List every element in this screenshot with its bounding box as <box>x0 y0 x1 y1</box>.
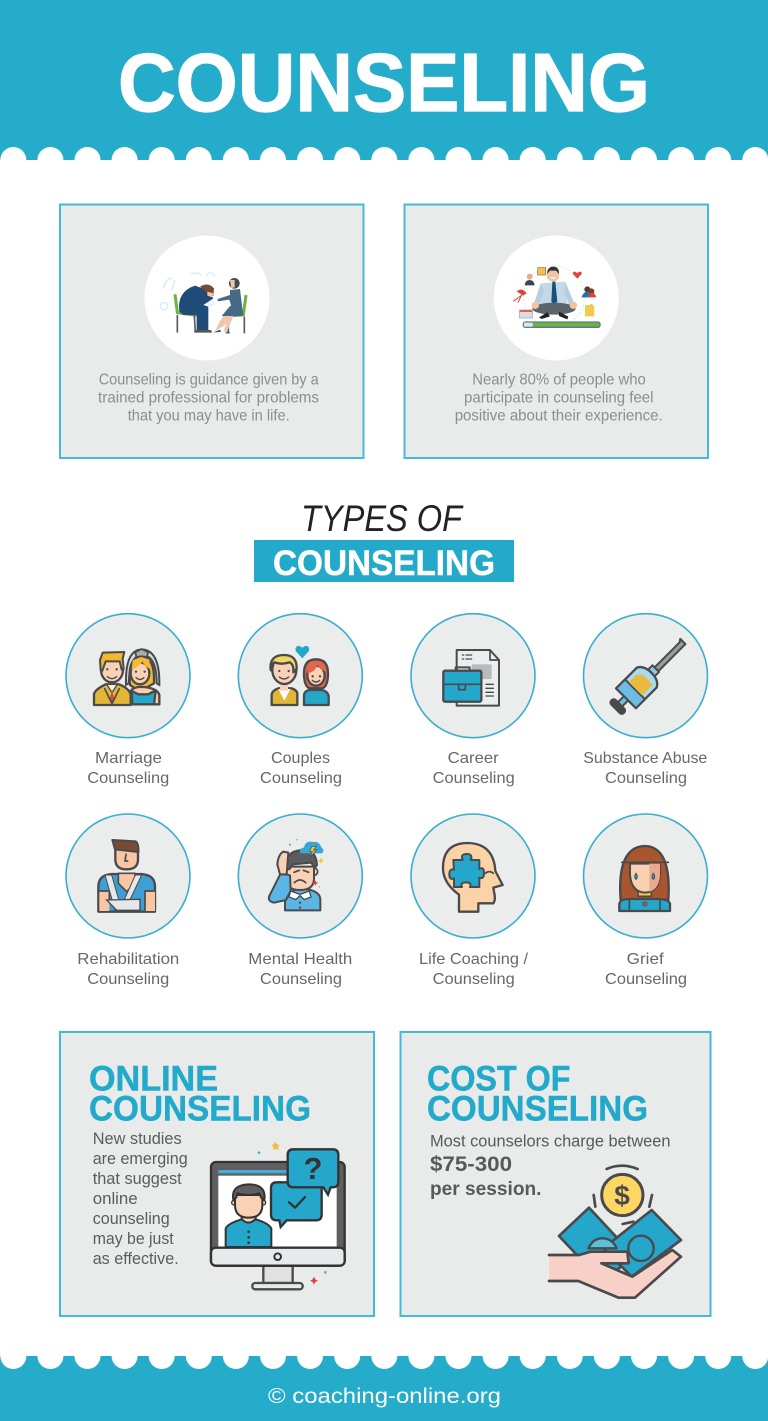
text: statistic <box>455 372 663 424</box>
text: statistic: Nearly 80% of people who <box>472 372 646 388</box>
type: rehabilitation counseling <box>66 814 190 988</box>
type: marriage counseling: Marriage <box>95 750 162 767</box>
type: life coaching counseling: Counseling <box>433 971 515 988</box>
text: cost description: per session. <box>430 1179 542 1200</box>
type: grief counseling: Grief <box>627 951 664 968</box>
header banner with title <box>0 0 768 160</box>
text: cost description <box>430 1132 670 1200</box>
text: definition <box>98 372 319 424</box>
type: grief counseling <box>584 814 708 988</box>
icon: monitor with video call and chat bubbles <box>211 1142 345 1289</box>
type: couples counseling: Counseling <box>260 770 342 787</box>
icon: crying woman <box>619 846 670 911</box>
heading: types of counseling <box>254 498 514 583</box>
icon: man with arm sling <box>98 840 155 912</box>
text: question mark in bubble: ? <box>304 1151 322 1186</box>
text: online counseling body: as effective. <box>93 1249 179 1268</box>
type: marriage counseling <box>66 614 190 787</box>
panel: online counseling <box>60 1032 374 1316</box>
type: career counseling: Counseling <box>433 770 515 787</box>
illustration: client and counselor on chairs <box>160 272 246 334</box>
type: marriage counseling: Counseling <box>87 770 169 787</box>
type: substance abuse counseling: Substance Abuse <box>583 750 707 767</box>
header banner with title: COUNSELING <box>118 36 650 129</box>
text: online counseling body: online <box>93 1189 138 1208</box>
type: mental health counseling: Mental Health <box>248 951 352 968</box>
footer banner with credit: © coaching-online.org <box>268 1385 501 1408</box>
text: online counseling body: that suggest <box>93 1169 182 1188</box>
type: rehabilitation counseling: Counseling <box>87 971 169 988</box>
text: online counseling body <box>93 1129 188 1268</box>
heading: online counseling: ONLINE <box>89 1060 218 1098</box>
heading: cost of counseling: COUNSELING <box>427 1090 648 1128</box>
panel: definition of counseling <box>60 204 364 458</box>
type: grief counseling: Counseling <box>605 971 687 988</box>
type: substance abuse counseling: Counseling <box>605 770 687 787</box>
illustration: meditating man with life icons <box>513 266 600 327</box>
type: career counseling: Career <box>448 750 499 767</box>
text: online counseling body: New studies <box>93 1129 182 1148</box>
icon: briefcase and document <box>443 650 499 706</box>
panel: positive experience statistic <box>404 204 708 458</box>
type: rehabilitation counseling: Rehabilitation <box>77 951 179 968</box>
text: online counseling body: may be just <box>93 1229 174 1248</box>
heading: online counseling <box>89 1060 311 1128</box>
icon: bride and groom <box>94 649 159 705</box>
text: definition: trained professional for problems <box>98 390 319 406</box>
type: couples counseling <box>238 614 362 787</box>
heading: online counseling: COUNSELING <box>89 1090 311 1128</box>
type: mental health counseling <box>238 814 362 988</box>
type: mental health counseling: Counseling <box>260 971 342 988</box>
text: cost description: $75-300 <box>430 1153 512 1176</box>
text: online counseling body: counseling <box>93 1209 170 1228</box>
type: life coaching counseling <box>411 814 535 988</box>
heading: types of counseling: TYPES OF <box>301 498 464 539</box>
type: life coaching counseling: Life Coaching / <box>419 951 529 968</box>
text: definition: that you may have in life. <box>128 408 290 424</box>
text: online counseling body: are emerging <box>93 1149 188 1168</box>
text: dollar sign on coin: $ <box>614 1180 630 1211</box>
icon: couple with heart <box>270 646 329 705</box>
type: substance abuse counseling <box>583 614 708 787</box>
heading: cost of counseling <box>427 1060 648 1128</box>
icon: stressed man with storm cloud <box>269 839 324 910</box>
type: couples counseling: Couples <box>271 750 330 767</box>
panel: cost of counseling <box>400 1032 710 1316</box>
icon: head with puzzle piece <box>443 843 503 912</box>
heading: types of counseling: COUNSELING <box>273 544 495 583</box>
icon: hand holding money and coin <box>549 1166 681 1298</box>
text: cost description: Most counselors charge between <box>430 1132 670 1150</box>
text: statistic: participate in counseling feel <box>464 390 654 406</box>
heading: cost of counseling: COST OF <box>427 1060 570 1098</box>
icon: syringe <box>606 632 693 719</box>
text: statistic: positive about their experience. <box>455 408 663 424</box>
type: career counseling <box>411 614 535 787</box>
text: definition: Counseling is guidance given by a <box>99 372 319 388</box>
footer banner with credit <box>0 1356 768 1421</box>
